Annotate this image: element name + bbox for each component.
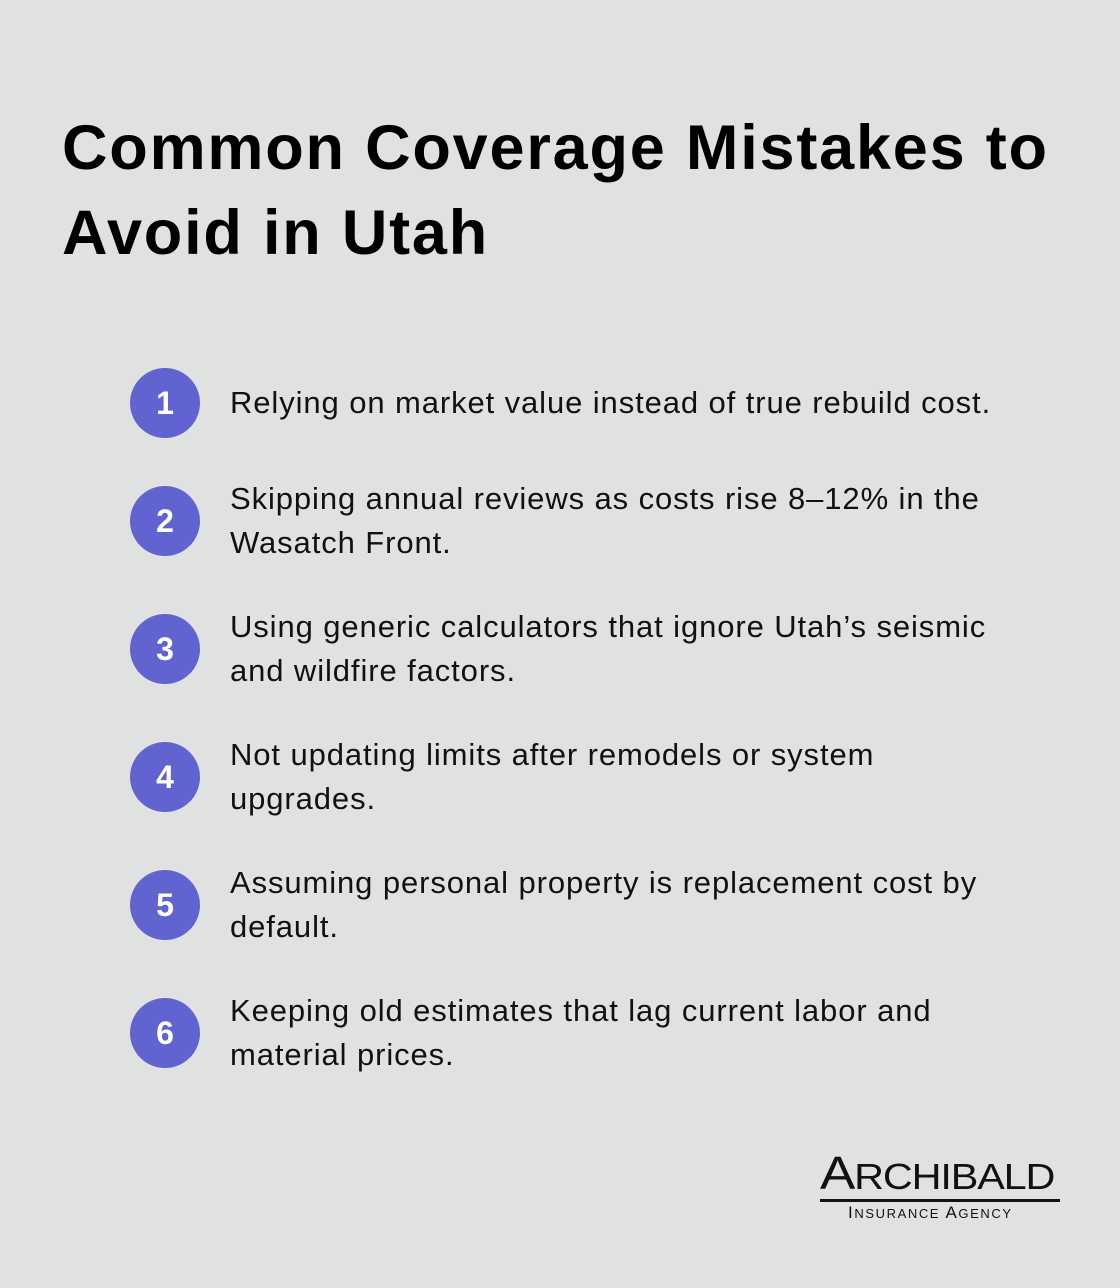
item 5: default. <box>230 909 339 944</box>
logo: ARCHIBALD <box>820 1147 1054 1199</box>
title <box>62 113 1049 268</box>
item 1: 1 <box>156 385 174 421</box>
item 6: material prices. <box>230 1037 455 1072</box>
item 3 <box>130 609 986 688</box>
logo <box>820 1147 1060 1222</box>
title: Avoid in Utah <box>62 198 489 268</box>
item 2: Wasatch Front. <box>230 525 452 560</box>
item 5: 5 <box>156 887 174 923</box>
item 3: Using generic calculators that ignore Utah’s seismic <box>230 609 986 644</box>
item 4: upgrades. <box>230 781 376 816</box>
item 6: 6 <box>156 1015 174 1051</box>
item 2 <box>130 481 980 560</box>
item 2: Skipping annual reviews as costs rise 8–12% in the <box>230 481 980 516</box>
item 1 <box>130 368 991 438</box>
logo: INSURANCE AGENCY <box>848 1203 1013 1222</box>
item 4: 4 <box>156 759 174 795</box>
item 1: Relying on market value instead of true rebuild cost. <box>230 385 991 420</box>
item 6 <box>130 993 932 1072</box>
item 2: 2 <box>156 503 174 539</box>
item 3: 3 <box>156 631 174 667</box>
item 4 <box>130 737 874 816</box>
item 6: Keeping old estimates that lag current labor and <box>230 993 932 1028</box>
item 5: Assuming personal property is replacement cost by <box>230 865 977 900</box>
item 4: Not updating limits after remodels or system <box>230 737 874 772</box>
item 3: and wildfire factors. <box>230 653 516 688</box>
title: Common Coverage Mistakes to <box>62 113 1049 183</box>
item 5 <box>130 865 977 944</box>
